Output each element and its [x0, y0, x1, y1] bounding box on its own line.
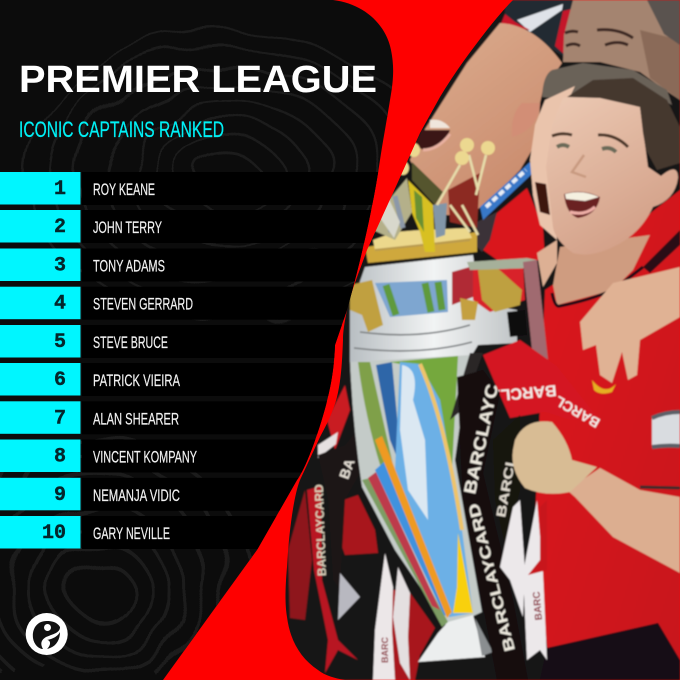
white scarf piece left [318, 432, 338, 458]
row black bars [82, 172, 402, 549]
collar white letters [486, 170, 526, 207]
subtitle: ICONIC CAPTAINS RANKED [19, 117, 224, 142]
armband [652, 412, 680, 447]
red scraps behind white ribbons [385, 590, 435, 680]
teammate arm round shoulder [580, 267, 680, 383]
row 6: PATRICK VIEIRA [93, 371, 180, 390]
trophy blue side stripe [375, 462, 450, 617]
contour texture top [25, 33, 435, 317]
captain lower lip [570, 207, 595, 213]
row 1: 1 [54, 178, 66, 201]
third player face [530, 86, 575, 240]
bald player teeth [430, 120, 450, 128]
trophy light blue panel [395, 362, 473, 617]
row 3: TONY ADAMS [93, 256, 165, 276]
row 8: VINCENT KOMPANY [93, 448, 197, 466]
crown balls [397, 138, 495, 175]
trophy red stripe [368, 472, 440, 610]
white shirt patch [517, 4, 563, 32]
white ribbon text right: BARC [532, 591, 545, 621]
photo: captain lifting the trophy [280, 0, 680, 680]
contour texture bottom [0, 443, 250, 672]
crown red centre [448, 173, 480, 228]
trophy body silver [350, 352, 482, 628]
club crest [592, 380, 616, 394]
teammate hair [647, 0, 680, 45]
white ribbon right 1 [500, 500, 525, 617]
gold lion left [350, 280, 383, 332]
trophy neck colour band [375, 280, 448, 317]
row 1: ROY KEANE [93, 180, 155, 199]
third player mouth [535, 182, 550, 215]
row 5: STEVE BRUCE [93, 333, 168, 352]
row 6 [0, 363, 180, 396]
row 4: STEVEN GERRARD [93, 295, 193, 314]
captain teeth [565, 192, 599, 201]
background players top [504, 0, 572, 56]
trophy green panel [390, 356, 458, 470]
trophy handle [523, 260, 548, 360]
red patch top [500, 14, 530, 30]
teammate dark face [563, 0, 680, 100]
captain fist [512, 421, 597, 494]
crown left wing stripes [386, 196, 403, 232]
captain eyebrows [552, 134, 628, 147]
red jersey of bald player [483, 188, 545, 262]
row 10 [0, 516, 170, 548]
row 7: ALAN SHEARER [93, 409, 179, 428]
red collar behind [555, 9, 572, 58]
crown white left [378, 195, 400, 238]
trophy base edge [475, 618, 493, 656]
white ribbon right 2 [523, 500, 547, 660]
row 5: 5 [54, 331, 66, 354]
row 6: 6 [54, 369, 66, 392]
white ribbon 1 [373, 553, 395, 680]
trophy dark blue strip [376, 362, 402, 470]
captain neck [553, 235, 650, 305]
trophy bowl white [350, 255, 517, 362]
neck red reflection [452, 266, 473, 305]
dark-red cloth far left [288, 490, 312, 620]
teammate cheek shadow [640, 30, 680, 100]
forearm [567, 468, 680, 573]
row 3 [0, 248, 165, 281]
captain mouth [564, 192, 600, 218]
teammate hand on chest [537, 240, 557, 287]
trophy gold lettering edge [420, 364, 462, 530]
black textured panel [0, 0, 435, 680]
bald player mouth [415, 130, 450, 151]
second ribbon text: BARCL [493, 455, 519, 519]
bald player head [410, 23, 562, 215]
trophy handle frame top [467, 258, 537, 270]
dark scarf at jersey [475, 212, 497, 252]
central black ribbon [457, 370, 528, 680]
neck stripes [386, 282, 442, 315]
white ribbon text: BARC [380, 637, 390, 663]
black ribbon left [318, 420, 365, 590]
trophy rim lines [354, 325, 472, 351]
crown blue panel [433, 203, 447, 238]
red ribbon right [528, 500, 547, 575]
scarf text upper: BARCLA [488, 381, 557, 404]
trophy yellow panel [453, 533, 473, 613]
central ribbon text upper: BARCLAYC [460, 382, 502, 496]
captain eyes [557, 145, 616, 152]
crown gold wires [437, 155, 486, 235]
row 5 [0, 325, 168, 358]
grey patch [338, 573, 360, 620]
crown olive wing [412, 162, 443, 205]
scarf red over fist [483, 340, 600, 420]
white ribbon 2 [393, 567, 410, 680]
armband stripes [652, 412, 680, 447]
crown green yellow wing [408, 180, 435, 252]
photo backdrop [280, 0, 680, 680]
row 10: 10 [42, 522, 66, 545]
row 4: 4 [54, 293, 66, 316]
gold ornament [460, 298, 478, 320]
ranking list [0, 172, 197, 548]
row 9: 9 [54, 484, 66, 507]
ribbon text left: BA [336, 457, 358, 481]
trophy base [418, 615, 485, 662]
row 2: 2 [54, 216, 66, 239]
trophy edge stripe [362, 478, 448, 627]
row 10: GARY NEVILLE [93, 524, 170, 543]
ribbon text left lower: BARCLAYCARD [312, 484, 329, 576]
crown band stripes [375, 240, 470, 250]
captain nose shadow [572, 155, 586, 177]
captain hair [567, 78, 680, 170]
row 3: 3 [54, 254, 66, 278]
second black ribbon [493, 415, 520, 545]
red shirt of captain [535, 190, 680, 660]
dark scarves lower left [285, 400, 380, 680]
crown green band [414, 190, 424, 232]
red scarf left [327, 385, 350, 450]
trophy green panel left [358, 362, 402, 510]
crown band [365, 232, 477, 263]
third player hair [542, 63, 672, 105]
row 7 [0, 401, 179, 434]
row 2: JOHN TERRY [93, 218, 162, 237]
crown left wing [373, 178, 412, 240]
red behind right lion [473, 262, 525, 312]
scarf text lower: BARCL [552, 393, 602, 431]
central ribbon text lower: BARCLAYCARD [466, 501, 519, 653]
trophy orange stripe [375, 436, 452, 618]
gold lion right [478, 266, 522, 312]
captain face [546, 96, 678, 255]
row 1 [0, 172, 155, 204]
shoulder trim [643, 230, 680, 273]
red ribbon left [307, 486, 358, 673]
black shorts [540, 623, 680, 680]
blue Barclaycard collar [480, 162, 533, 220]
trophy lettering [400, 365, 428, 520]
sleeve edge [640, 487, 680, 488]
row 8: 8 [54, 446, 66, 468]
small top ribbon [450, 353, 483, 420]
bald player ear [516, 104, 540, 115]
icon: brand logo [26, 613, 68, 655]
crown cream ornaments [373, 228, 472, 250]
row 9 [0, 478, 180, 510]
row 4 [0, 287, 193, 319]
bald player lower lip [423, 134, 450, 150]
row 2 [0, 210, 162, 242]
title: PREMIER LEAGUE [19, 59, 377, 101]
teammate brows and eyes [565, 30, 633, 46]
captain collar [552, 267, 643, 306]
row 9: NEMANJA VIDIC [93, 486, 180, 505]
black cuff [507, 310, 527, 337]
row 8 [0, 440, 197, 472]
row 7: 7 [54, 407, 66, 430]
red cloth centre left [335, 495, 378, 555]
